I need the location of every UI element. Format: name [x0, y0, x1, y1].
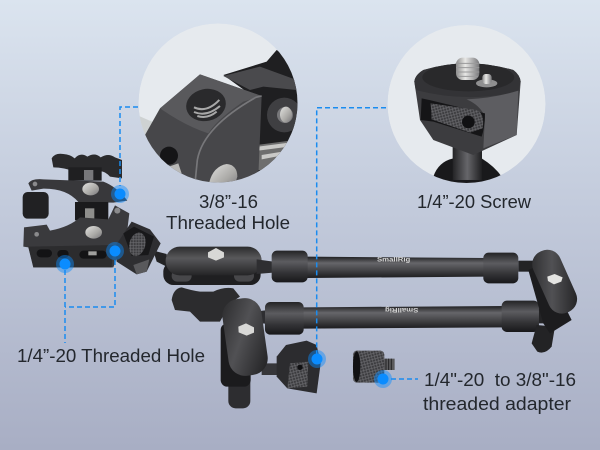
- icon: threaded adapter: [353, 351, 395, 383]
- label: 3/8"-16 threaded hole: 3/8”-16: [199, 192, 258, 212]
- articulated arms: [220, 245, 582, 408]
- label: threaded adapter: [423, 370, 576, 414]
- label: 3/8"-16 threaded hole: [166, 192, 290, 233]
- inset circle: 3/8"-16 threaded hole: [137, 24, 302, 190]
- clamp assembly: [23, 154, 262, 322]
- icon: lower arm knob: [172, 287, 240, 322]
- upper rod: [257, 251, 533, 283]
- icon: lower jaw: [23, 205, 129, 267]
- icon: clamp knob: [52, 154, 122, 181]
- lower rod: [255, 301, 553, 335]
- right joint: [528, 245, 582, 353]
- logo: SmallRig: [377, 258, 411, 264]
- label: 1/4"-20 screw: 1/4”-20 Screw: [417, 192, 532, 212]
- label: threaded adapter: 1/4"-20 to 3/8"-16: [424, 370, 576, 390]
- logo mirrored: SmallRig: [385, 306, 418, 312]
- icon: ball and neck: [434, 147, 501, 183]
- icon: upper jaw: [23, 179, 127, 220]
- callout leader lines: [65, 107, 418, 379]
- icon: upper ball joint: [163, 247, 262, 285]
- label: 3/8"-16 threaded hole: Threaded Hole: [166, 213, 290, 233]
- label: threaded adapter: threaded adapter: [423, 394, 571, 414]
- inset circle: 1/4"-20 screw: [388, 25, 546, 187]
- icon: swivel head: [115, 222, 167, 274]
- callout dots: [56, 185, 392, 388]
- label: 1/4"-20 threaded hole: 1/4”-20 Threaded Hole: [17, 346, 205, 366]
- left joint and lower head: [220, 296, 321, 408]
